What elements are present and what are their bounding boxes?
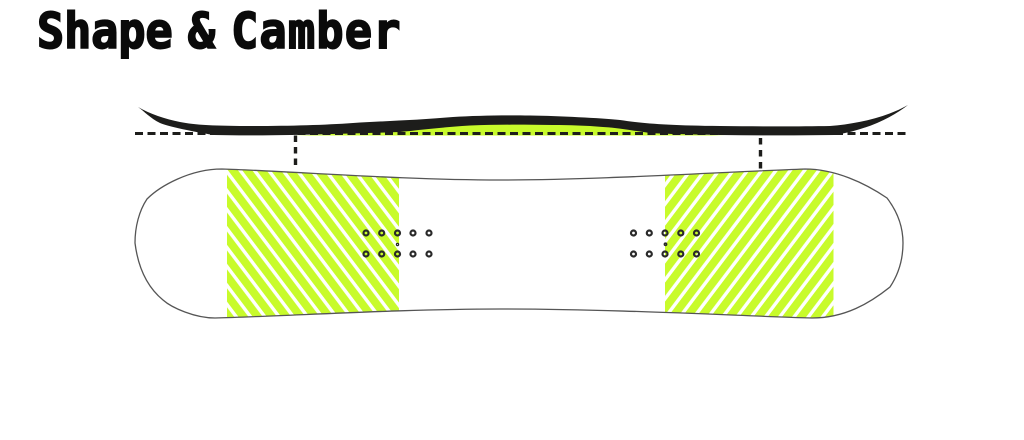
board side profile [138, 105, 908, 135]
snowboard top view [135, 165, 903, 323]
right contact point marker [759, 138, 762, 170]
camber profile diagram [135, 105, 908, 170]
right binding holes [631, 230, 699, 256]
title: Shape [37, 3, 200, 60]
title: & [188, 3, 242, 60]
baseline dashed line [135, 132, 907, 135]
title: Camber [231, 3, 402, 60]
left binding holes [364, 230, 432, 256]
right striped zone [665, 165, 834, 323]
camber lift fill [295, 123, 725, 136]
left striped zone [227, 165, 399, 323]
left contact point marker [294, 136, 297, 166]
board outline [135, 169, 903, 318]
